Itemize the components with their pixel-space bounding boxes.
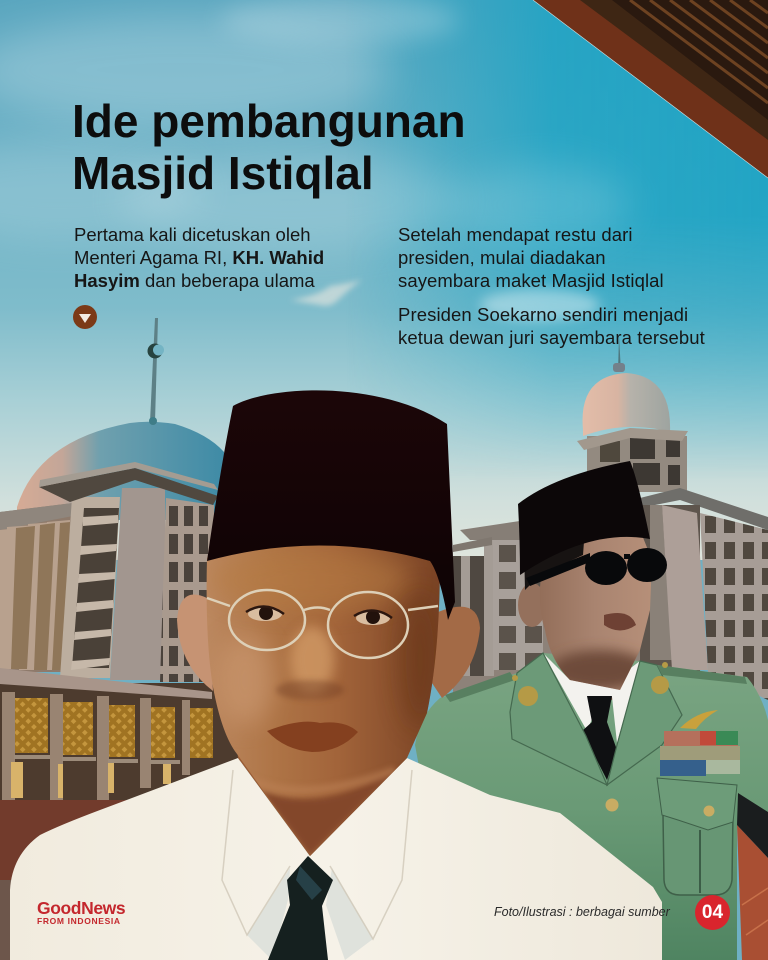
right plaza (737, 825, 768, 960)
page number badge (695, 895, 730, 930)
mosque left wing (0, 318, 240, 960)
uniform (415, 653, 768, 960)
plaza (0, 800, 240, 960)
peci (207, 390, 455, 620)
collar shading (247, 868, 373, 960)
mosque right wing (453, 336, 768, 960)
right slab (640, 488, 768, 530)
title: Ide pembangunan (72, 95, 466, 147)
left text block: Pertama kali dicetuskan oleh (74, 224, 311, 245)
medals (660, 710, 740, 776)
right text block two (398, 304, 705, 348)
face (206, 546, 440, 856)
right text block one: presiden, mulai diadakan (398, 247, 606, 268)
icon: down arrow button (73, 305, 97, 329)
tie (582, 696, 617, 780)
glasses (207, 590, 438, 658)
photo credit: Foto/Ilustrasi : berbagai sumber (494, 905, 670, 919)
left wall (0, 503, 73, 672)
tie (268, 856, 333, 960)
tower frame (60, 497, 120, 678)
narrow windows (160, 498, 214, 682)
right text block two: Presiden Soekarno sendiri menjadi (398, 304, 688, 325)
left text block: Menteri Agama RI, KH. Wahid (74, 247, 324, 268)
epaulettes and badges (445, 662, 747, 706)
shirt (10, 758, 662, 960)
pocket (657, 778, 737, 895)
left text block: Hasyim dan beberapa ulama (74, 270, 315, 291)
lapels (510, 653, 607, 785)
right text block one: sayembara maket Masjid Istiqlal (398, 270, 664, 291)
title (72, 95, 466, 199)
small dome finial (613, 336, 625, 372)
right ear (430, 607, 480, 698)
sky (0, 0, 768, 560)
left ear (177, 594, 213, 691)
main dome (17, 422, 224, 520)
dark arm shadow (737, 793, 768, 858)
eyes (246, 606, 392, 625)
title: Masjid Istiqlal (72, 147, 374, 199)
right text block one: Setelah mendapat restu dari (398, 224, 633, 245)
page number badge: 04 (702, 902, 723, 923)
roof corner top right (533, 0, 768, 178)
neck (232, 690, 418, 856)
right text block one (398, 224, 664, 291)
face (540, 536, 652, 690)
neck and collar (548, 620, 642, 700)
logo: GoodNews from Indonesia: GoodNews (37, 898, 125, 918)
ear (518, 583, 546, 627)
small dome (583, 373, 670, 436)
mouth (267, 722, 358, 752)
logo: GoodNews from Indonesia: FROM INDONESIA (37, 916, 121, 926)
portrait: man in green uniform (415, 461, 768, 960)
slab roof (39, 468, 218, 505)
tower face (110, 488, 166, 680)
hair (524, 528, 585, 590)
buttons (606, 798, 714, 816)
sunglasses (526, 548, 667, 586)
dome finial with crescent (148, 318, 164, 425)
portrait: man in white shirt (10, 390, 662, 960)
lower floor (0, 683, 240, 800)
right text block two: ketua dewan juri sayembara tersebut (398, 327, 705, 348)
left text block (74, 224, 324, 291)
peci (518, 461, 650, 575)
